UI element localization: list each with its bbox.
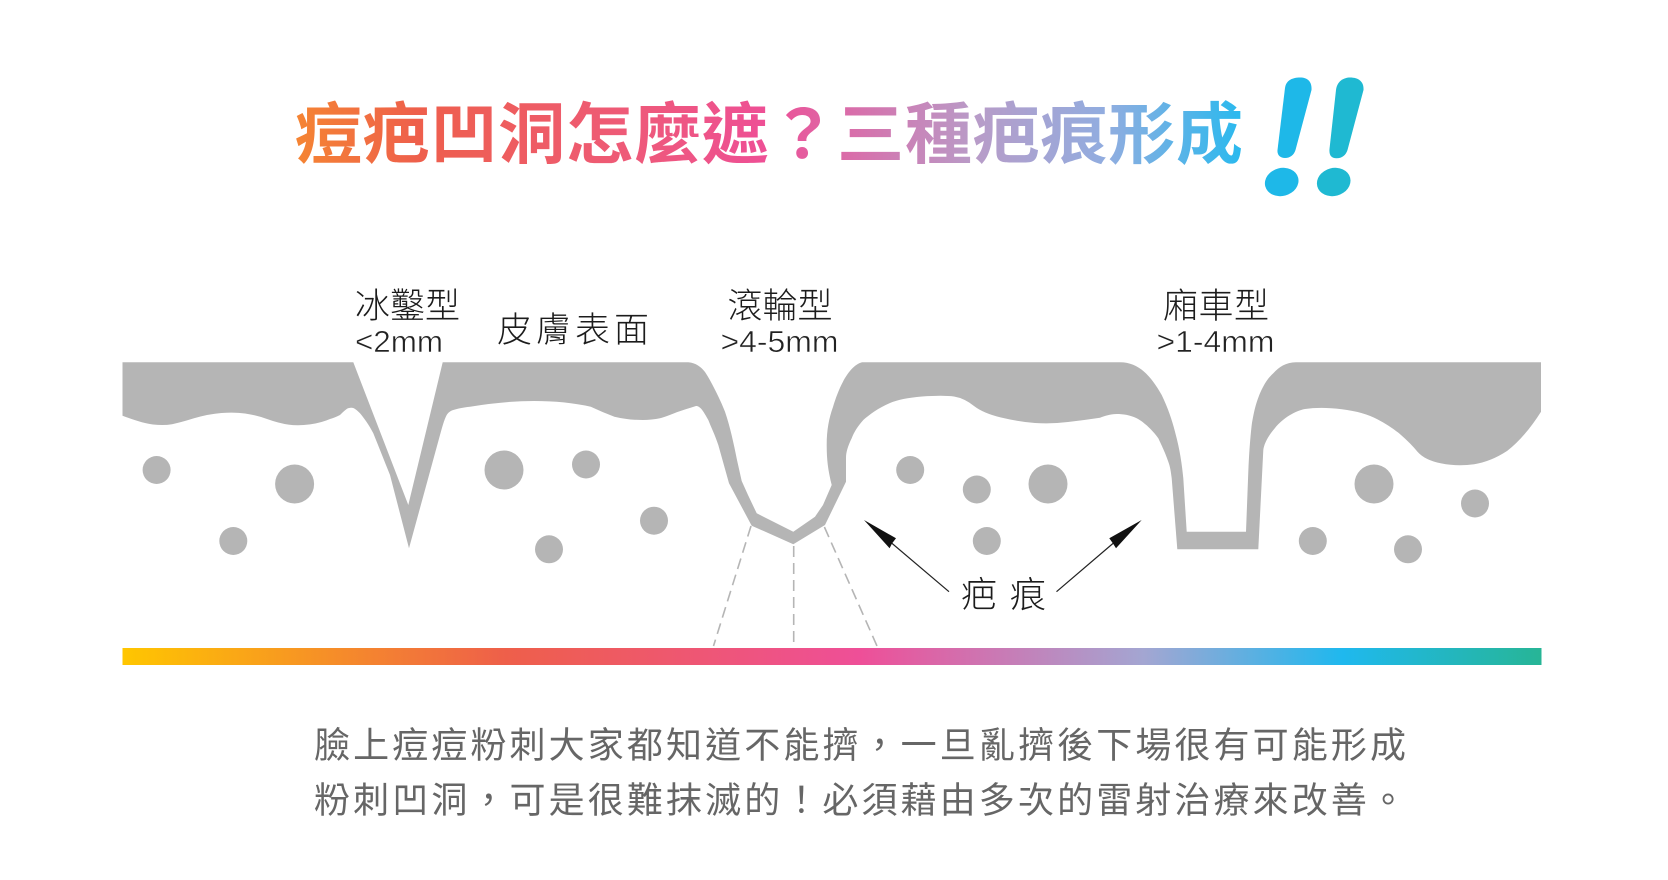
label: scar: 疤痕: [961, 566, 1046, 618]
body text: 粉刺凹洞，可是很難抹滅的！必須藉由多次的雷射治療來改善。: [314, 772, 1406, 824]
label: skin surface: 皮膚表面: [497, 302, 649, 353]
skin surface cross-section: [122, 362, 1541, 549]
label: rolling type: [720, 278, 838, 359]
label: boxcar type: 廂車型: [1163, 278, 1269, 329]
label: rolling type: >4-5mm: [720, 324, 838, 359]
arrow: right: [1056, 520, 1142, 592]
label: boxcar type: [1156, 278, 1274, 359]
label: rolling type: 滾輪型: [728, 278, 832, 329]
body text: [314, 716, 1406, 824]
body text: 臉上痘痘粉刺大家都知道不能擠，一旦亂擠後下場很有可能形成: [314, 716, 1406, 768]
skin cell dots: [143, 450, 1489, 563]
label: ice pick type: <2mm: [355, 324, 443, 359]
gradient bar: [122, 648, 1542, 665]
icon: double exclamation marks: [1262, 78, 1364, 200]
label: ice pick type: 冰鑿型: [355, 278, 460, 329]
title: 痘疤凹洞怎麼遮？三種疤痕形成: [295, 81, 1243, 178]
arrow: left: [864, 520, 949, 592]
label: ice pick type: [355, 278, 460, 359]
dashed laser lines: [714, 526, 877, 646]
label: boxcar type: >1-4mm: [1156, 324, 1274, 359]
